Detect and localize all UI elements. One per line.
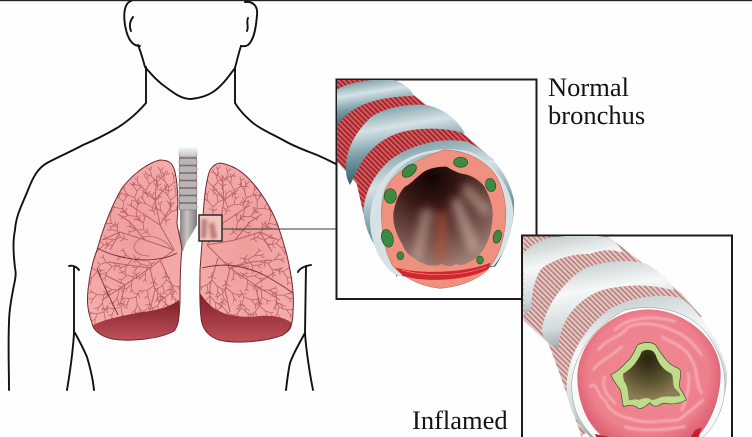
inflamed cartilage ring 3 (567, 296, 727, 437)
inflamed mucosa (577, 309, 721, 437)
inflamed bronchus drawing (523, 235, 727, 437)
marker interior (199, 215, 222, 241)
normal cartilage ring 3 (363, 140, 514, 277)
left lung base (93, 300, 179, 340)
label: normal bronchus: Normal (548, 72, 629, 102)
left inner arm (67, 266, 94, 390)
inflamed cartilage ring 1 (523, 235, 622, 317)
marker frame (199, 215, 222, 241)
normal lumen (393, 167, 493, 266)
normal cartilage ring 1 (336, 80, 413, 128)
zoom marker on lung (199, 215, 222, 241)
left lung tissue (87, 160, 182, 340)
right lung tissue (200, 163, 293, 342)
trachea fade (177, 146, 199, 159)
right lung outline (200, 163, 293, 342)
marker bronchus detail (201, 219, 217, 239)
normal lumen streaks (417, 190, 485, 258)
inflamed lumen (623, 350, 681, 400)
jaw and neck (138, 45, 241, 99)
normal mucous glands (380, 157, 503, 264)
normal muscle tube (336, 79, 493, 277)
inflamed tube (523, 237, 702, 437)
top edge line (0, 0, 752, 1)
normal mucosa (382, 150, 506, 288)
label: normal bronchus: bronchus (548, 100, 645, 130)
inflamed mucosa folds (590, 318, 703, 430)
bronchial split (177, 208, 197, 251)
trachea (177, 146, 199, 251)
right inner arm (286, 265, 313, 390)
normal white band (370, 149, 513, 277)
leader line (222, 228, 337, 230)
inflamed swollen edge (611, 342, 686, 408)
inflamed white band (572, 308, 725, 437)
inflamed cartilage ring 2 (542, 261, 674, 348)
label: inflamed bronchus: Inflamed (412, 405, 508, 435)
right shoulder (235, 68, 336, 164)
left lung fissures (97, 248, 177, 315)
right lung fissure (202, 265, 293, 293)
right ear (241, 2, 257, 46)
body outline (9, 1, 336, 390)
normal bronchus drawing (336, 79, 514, 288)
right lung base (200, 293, 292, 342)
inflamed panel frame (522, 236, 732, 437)
left lung (79, 160, 185, 340)
panel: inflamed bronchus (522, 235, 732, 437)
left lung airways (88, 166, 180, 324)
normal panel frame (336, 80, 536, 299)
normal smooth muscle band (395, 263, 491, 280)
panel: normal bronchus (336, 79, 536, 299)
right lung airways (200, 166, 293, 319)
trachea rings (179, 150, 197, 210)
inflamed muscle hint (595, 427, 702, 437)
left lung outline (87, 160, 182, 340)
normal cartilage ring 2 (346, 105, 465, 185)
left ear (124, 1, 140, 46)
left shoulder and torso (9, 67, 146, 390)
right lung (197, 163, 301, 342)
